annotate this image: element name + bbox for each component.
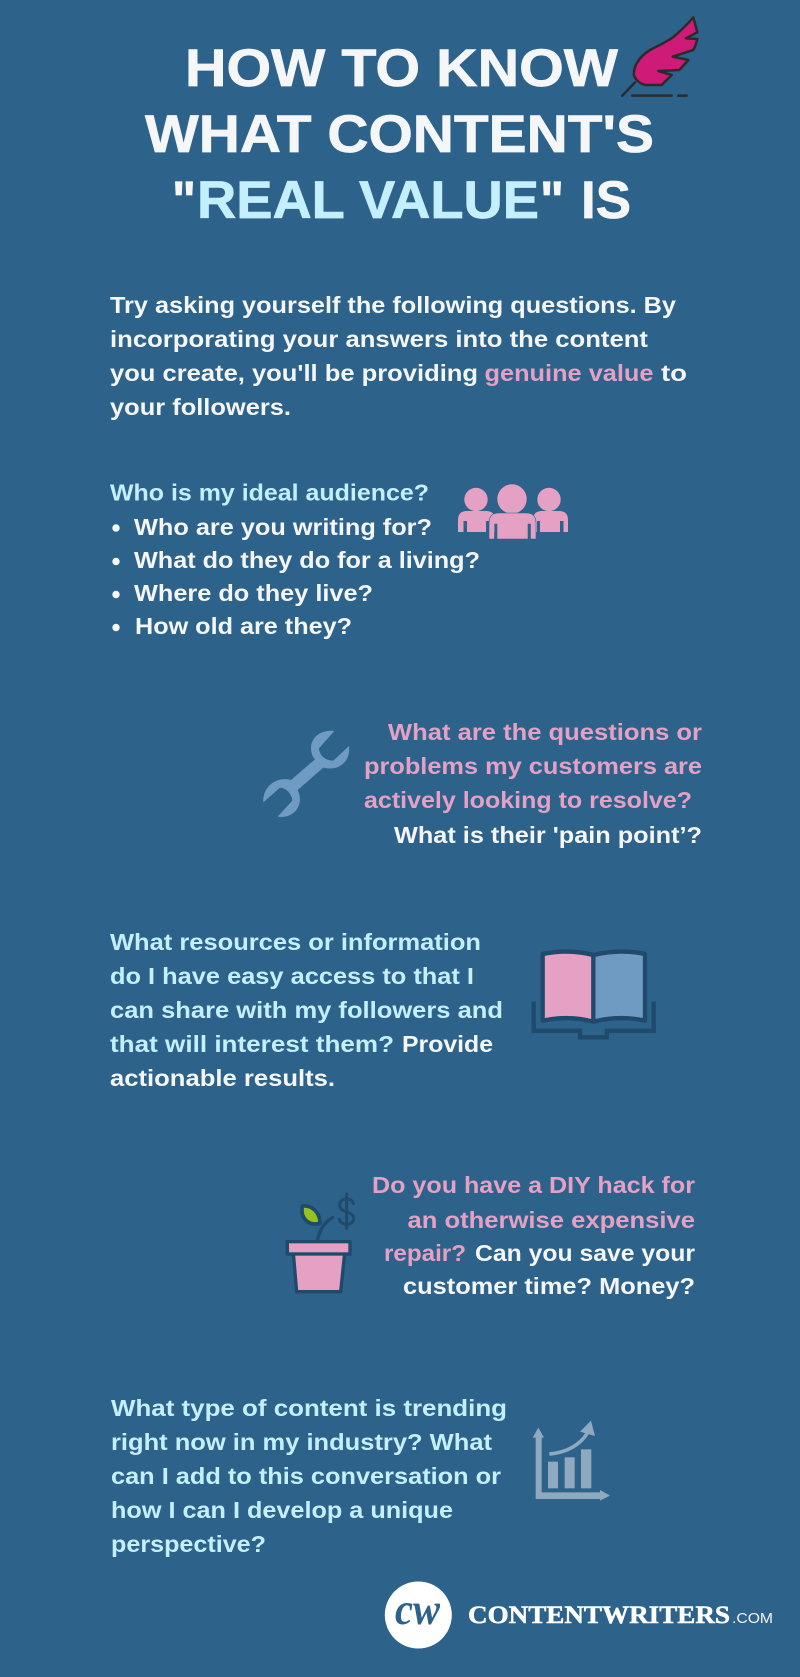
icon: plant pot with dollar sign	[287, 1194, 354, 1292]
section: customer problems: actively looking to resolve?	[364, 787, 692, 813]
section: resources	[110, 929, 503, 1091]
section: trending content: how I can I develop a unique	[111, 1497, 453, 1523]
intro text: your followers.	[110, 394, 291, 420]
logo wordmark: CONTENTWRITERS	[468, 1602, 730, 1629]
title: WHAT CONTENT'S	[145, 105, 654, 164]
audience bullet list: What do they do for a living?	[134, 547, 480, 573]
section: trending content	[111, 1395, 507, 1557]
section: trending content: can I add to this conversation or	[111, 1463, 501, 1489]
logo: contentwriters.com	[385, 1582, 773, 1648]
section: resources: can share with my followers and	[110, 997, 503, 1023]
audience bullet list: How old are they?	[135, 613, 352, 639]
logo mark	[385, 1582, 452, 1648]
audience bullet list	[112, 514, 480, 639]
title: HOW TO KNOW	[185, 39, 618, 98]
title: "	[540, 171, 564, 230]
title: IS	[581, 171, 631, 230]
title: "	[172, 171, 196, 230]
audience bullet list: Where do they live?	[134, 580, 373, 606]
intro text: you create, you'll be providing	[110, 360, 478, 386]
section: customer problems: What is their 'pain point’?	[394, 822, 702, 848]
section: trending content: What type of content is trending	[111, 1395, 507, 1421]
section: DIY hack: an otherwise expensive	[408, 1207, 695, 1233]
section: ideal audience	[110, 480, 480, 639]
intro text: Try asking yourself the following questions. By	[110, 292, 676, 318]
intro text: incorporating your answers into the content	[110, 326, 648, 352]
section: resources: do I have easy access to that I	[110, 963, 474, 989]
icon: feather quill	[622, 17, 697, 96]
icon: open book	[534, 952, 654, 1037]
intro text	[110, 292, 687, 420]
logo mark: cw	[395, 1585, 441, 1634]
intro text: to	[661, 360, 687, 386]
section: resources: Provide	[402, 1031, 493, 1057]
section: trending content: perspective?	[111, 1531, 266, 1557]
section: customer problems: What are the questions or	[388, 719, 702, 745]
section: DIY hack	[372, 1172, 695, 1299]
section: trending content: right now in my industry? What	[111, 1429, 492, 1455]
section: resources: What resources or information	[110, 929, 481, 955]
icon: people group	[458, 484, 568, 539]
section: resources: actionable results.	[110, 1065, 335, 1091]
title	[145, 39, 654, 230]
title: REAL VALUE	[197, 171, 539, 230]
section: customer problems	[364, 719, 702, 848]
section: DIY hack: customer time? Money?	[403, 1273, 695, 1299]
audience bullet list: Who are you writing for?	[134, 514, 432, 540]
section: customer problems: problems my customers are	[364, 753, 702, 779]
icon: wrench	[263, 731, 349, 817]
section: DIY hack: repair?	[384, 1240, 466, 1266]
audience heading: Who is my ideal audience?	[110, 480, 429, 506]
logo wordmark: .COM	[732, 1610, 773, 1627]
icon: growth chart	[533, 1421, 610, 1501]
section: DIY hack: Do you have a DIY hack for	[372, 1172, 695, 1198]
section: resources: that will interest them?	[110, 1031, 394, 1057]
intro text: genuine value	[484, 360, 654, 386]
section: DIY hack: Can you save your	[475, 1240, 695, 1266]
